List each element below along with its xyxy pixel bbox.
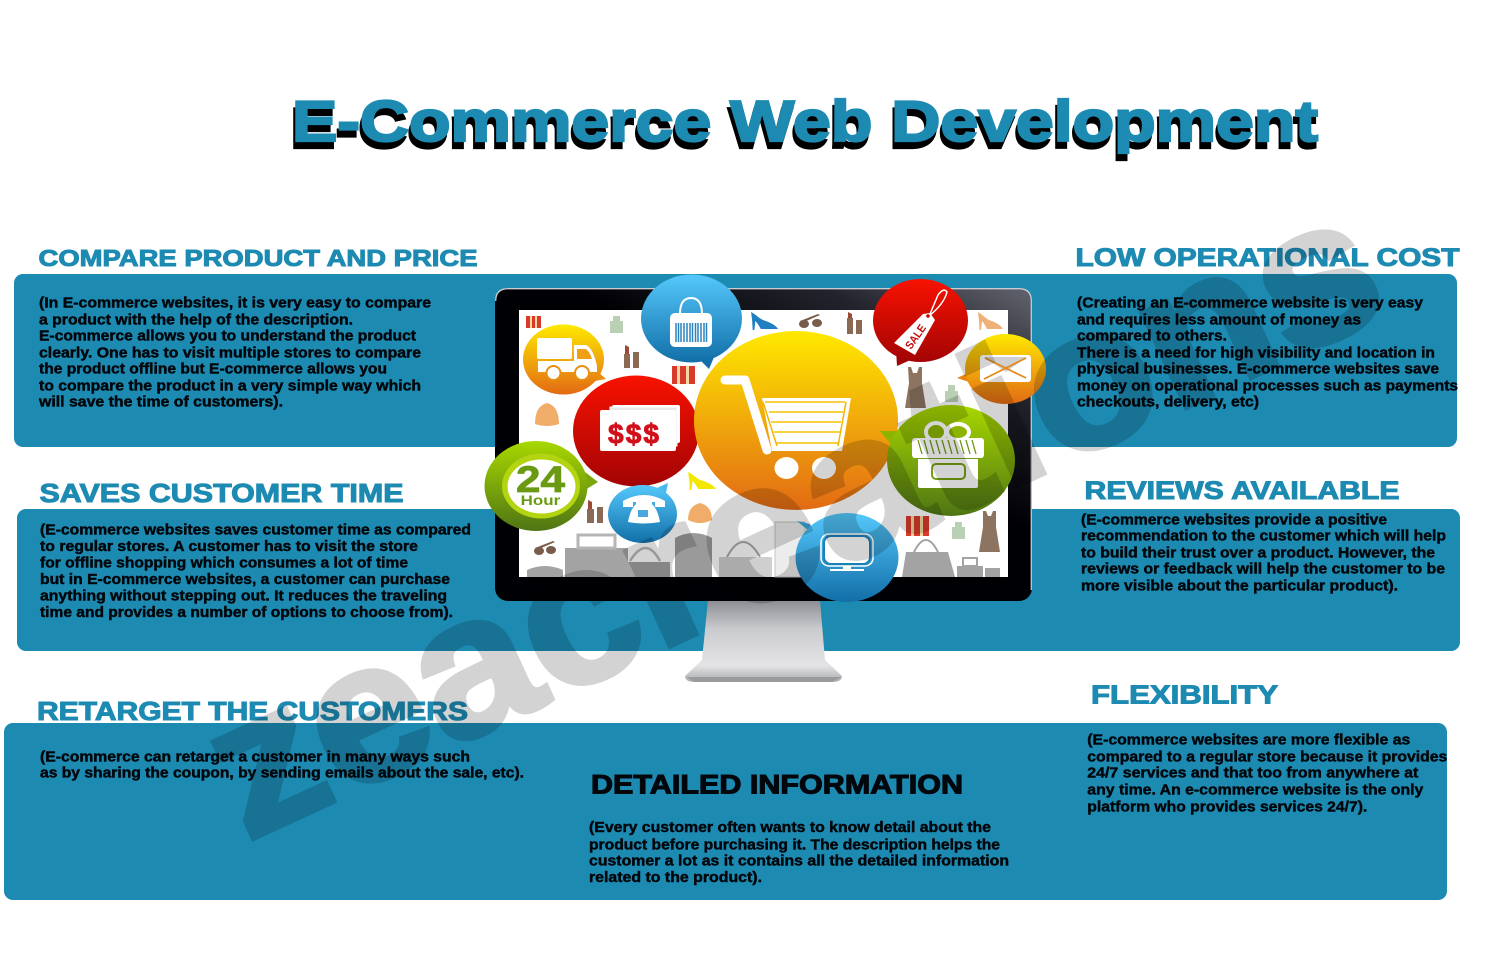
watermark: zeacreations: [171, 149, 1412, 880]
body text: flexibility: any time. An e-commerce website is the only: [1087, 782, 1423, 798]
grey shopping bags: [527, 522, 1000, 577]
heading: low operational cost: LOW OPERATIONAL COST: [1076, 244, 1460, 272]
coin purses: [535, 403, 712, 523]
body text: detailed information: product before purchasing it. The description helps the: [589, 837, 1000, 853]
body text: compare product and price: (In E-commerce websites, it is very easy to compare: [39, 296, 431, 312]
body text: detailed information: customer a lot as it contains all the detailed information: [589, 853, 1009, 869]
body text: reviews available: (E-commerce websites provide a positive: [1081, 512, 1387, 528]
icon: shopping cart: [725, 380, 851, 479]
body text: saves customer time: for offline shopping which consumes a lot of time: [40, 555, 408, 571]
bubble: sale tag: [873, 279, 968, 366]
dresses: [905, 367, 1000, 552]
icon: sale tag: SALE: [904, 322, 929, 352]
body text: low operational cost: [1077, 296, 1458, 411]
body text: saves customer time: but in E-commerce websites, a customer can purchase: [40, 572, 450, 588]
panel: middle band: [17, 509, 1460, 651]
body text: reviews available: recommendation to the customer which will help: [1081, 528, 1446, 544]
bubble: delivery truck: [523, 324, 606, 394]
high heel shoes: [688, 312, 1003, 490]
heading: flexibility: FLEXIBILITY: [1091, 682, 1278, 710]
bubble: computer display: [796, 513, 898, 602]
bubble: telephone: [608, 483, 677, 543]
body text: compare product and price: E-commerce allows you to understand the product: [39, 329, 416, 345]
gift boxes: [526, 316, 929, 536]
body text: detailed information: (Every customer often wants to know detail about the: [589, 820, 991, 836]
body text: saves customer time: to regular stores. A customer has to visit the store: [40, 539, 418, 555]
bubble: shopping bag: [641, 274, 742, 369]
body text: saves customer time: [40, 522, 471, 621]
body text: saves customer time: anything without stepping out. It reduces the traveling: [40, 588, 447, 604]
heading: saves customer time: SAVES CUSTOMER TIME: [40, 480, 404, 508]
icon: 24 hour clock: 24: [516, 459, 566, 500]
body text: flexibility: 24/7 services and that too from anywhere at: [1087, 765, 1418, 781]
monitor bezel: [495, 288, 1032, 601]
section: reviews available: [1081, 477, 1446, 594]
heading: detailed information: DETAILED INFORMATION: [591, 770, 963, 800]
body text: low operational cost: compared to others.: [1077, 329, 1227, 345]
body text: compare product and price: [38, 296, 431, 411]
icon: 24 hour clock: Hour: [521, 492, 561, 508]
icon: 24 hour clock: [502, 454, 580, 518]
icon: envelope: [980, 355, 1031, 382]
panel: bottom band: [4, 723, 1447, 900]
monitor illustration: [484, 274, 1046, 682]
heading: retarget the customers: RETARGET THE CUSTOMERS: [37, 698, 468, 726]
body text: compare product and price: the product offline but E-commerce allows you: [39, 362, 387, 378]
icon: telephone: [623, 495, 665, 524]
body text: detailed information: related to the product).: [589, 870, 762, 886]
heading: reviews available: REVIEWS AVAILABLE: [1084, 477, 1400, 505]
body text: flexibility: compared to a regular store because it provides: [1087, 749, 1447, 765]
section: saves customer time: [40, 480, 471, 621]
bubble: money: [573, 376, 699, 486]
body text: saves customer time: (E-commerce websites saves customer time as compared: [40, 522, 471, 538]
body text: retarget the customers: [40, 749, 524, 781]
heading: compare product and price: COMPARE PRODUCT AND PRICE: [38, 245, 478, 271]
body text: reviews available: to build their trust over a product. However, the: [1081, 545, 1435, 561]
body text: compare product and price: clearly. One has to visit multiple stores to compare: [39, 345, 421, 361]
section: flexibility: [1087, 682, 1447, 815]
section: retarget the customers: [37, 698, 524, 781]
body text: reviews available: [1081, 512, 1446, 594]
icon: banknotes: $$$: [608, 418, 659, 450]
icon: computer display: [821, 534, 873, 571]
bubble: 24 hour: [484, 441, 598, 531]
body text: compare product and price: a product with the help of the description.: [39, 312, 353, 328]
body text: compare product and price: will save the time of customers).: [38, 395, 283, 411]
body text: saves customer time: time and provides a number of options to choose from).: [40, 605, 453, 621]
section: low operational cost: [1076, 244, 1460, 411]
bubble: shopping cart: [694, 331, 898, 510]
lipsticks: [587, 312, 862, 523]
body text: detailed information: [589, 820, 1009, 886]
monitor stand: [685, 600, 842, 682]
title: E-Commerce Web Development: [292, 90, 1318, 154]
body text: reviews available: reviews or feedback will help the customer to be: [1081, 561, 1445, 577]
body text: low operational cost: and requires less amount of money as: [1077, 312, 1361, 328]
section: compare product and price: [38, 245, 478, 411]
body text: reviews available: more visible about the particular product).: [1081, 578, 1398, 594]
section: detailed information: [589, 770, 1009, 886]
body text: low operational cost: There is a need for high visibility and location in: [1077, 345, 1435, 361]
screen shopping items: [526, 312, 1003, 577]
icon: gift box: [912, 423, 984, 488]
body text: low operational cost: physical businesses. E-commerce websites save: [1077, 362, 1439, 378]
body text: flexibility: [1087, 732, 1447, 815]
body text: low operational cost: (Creating an E-commerce website is very easy: [1077, 296, 1423, 312]
body text: retarget the customers: as by sharing the coupon, by sending emails about the sale, etc).: [40, 765, 524, 781]
body text: compare product and price: to compare the product in a very simple way which: [39, 378, 421, 394]
body text: low operational cost: money on operational processes such as payments: [1077, 378, 1458, 394]
body text: retarget the customers: (E-commerce can retarget a customer in many ways such: [40, 749, 470, 765]
panel: top band: [14, 274, 1457, 447]
body text: flexibility: platform who provides services 24/7).: [1087, 799, 1367, 815]
sunglasses: [534, 314, 822, 555]
body text: flexibility: (E-commerce websites are more flexible as: [1087, 732, 1410, 748]
monitor screen: [519, 310, 1008, 577]
body text: low operational cost: checkouts, delivery, etc): [1077, 395, 1259, 411]
bubble: envelope: [957, 334, 1046, 404]
perfume bottles: [610, 316, 965, 539]
bubble: gift box: [880, 405, 1015, 516]
icon: barcode bag: [670, 298, 712, 347]
icon: truck: [537, 338, 597, 380]
